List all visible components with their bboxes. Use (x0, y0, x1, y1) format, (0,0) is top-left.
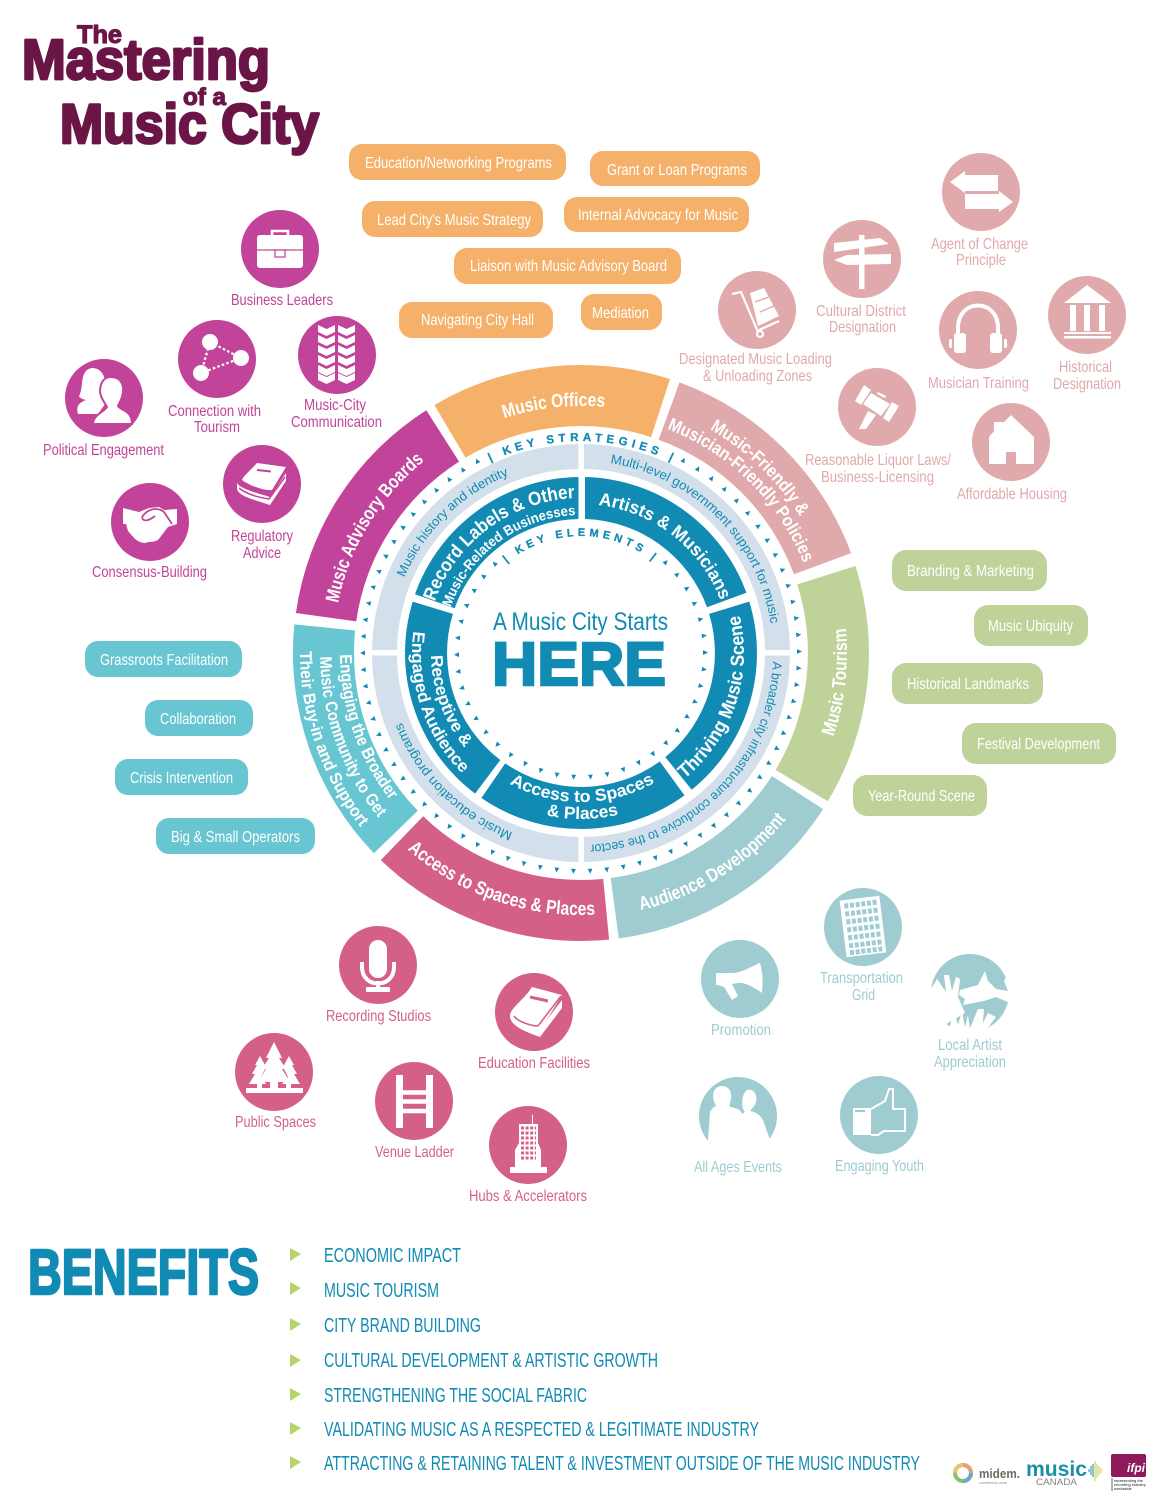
icon: Local Artist Appreciation (931, 954, 1010, 1033)
pill: Crisis Intervention (115, 759, 248, 795)
icon: Agent of Change Principle (942, 153, 1020, 231)
inner ring of arrowheads (437, 558, 717, 796)
label: Venue Ladder: Venue Ladder (375, 1144, 455, 1161)
pill: Liaison with Music Advisory Board: Liaison with Music Advisory Board (470, 258, 667, 275)
label: Access to Spaces: Access to Spaces (510, 775, 654, 803)
label: Transportation Grid (820, 970, 903, 1004)
segment: Access to Spaces & Places (381, 816, 609, 941)
icon: Musician Training (939, 291, 1017, 369)
outer ring labels (240, 370, 891, 978)
outer ring of arrowheads (323, 438, 835, 909)
pill: Liaison with Music Advisory Board (454, 248, 681, 284)
icon: Designated Music Loading & Unloading Zones (718, 271, 796, 349)
quadrant: multi-level government support (584, 444, 790, 650)
label: Public Spaces: Public Spaces (235, 1114, 316, 1131)
label: Affordable Housing: Affordable Housing (957, 486, 1067, 503)
segment: Receptive & Engaged Audience (405, 602, 500, 794)
key elements heading: | KEY ELEMENTS | (502, 528, 657, 564)
middle ring labels (396, 454, 782, 852)
label: Recording Studios: Recording Studios (326, 1008, 431, 1025)
icon: Reasonable Liquor Laws (838, 368, 916, 446)
pill: Year-Round Scene: Year-Round Scene (868, 788, 975, 805)
logo: ifpi: recording industry (1114, 1482, 1146, 1487)
label: Music Advisory Boards: Music Advisory Boards (326, 454, 423, 602)
pill: Branding & Marketing (892, 550, 1047, 591)
centre heading: HERE (492, 630, 666, 698)
quadrant: broader city infrastructure (584, 656, 790, 862)
bullet: Economic Impact: ECONOMIC IMPACT (324, 1245, 461, 1267)
label: Local Artist Appreciation: Appreciation (934, 1054, 1006, 1071)
label: Music education programs: Music education programs (396, 723, 512, 840)
pill: Mediation (581, 294, 662, 330)
pill: Internal Advocacy for Music: Internal Advocacy for Music (578, 207, 738, 224)
label: Thriving Music Scene: Thriving Music Scene (676, 616, 744, 776)
icon: Business Leaders (241, 210, 319, 288)
pill: Grant or Loan Programs: Grant or Loan Programs (607, 162, 747, 179)
teal community pills (85, 641, 315, 854)
logo: midem (955, 1465, 1020, 1485)
label: Musician-Friendly Policies: Musician-Friendly Policies (668, 418, 812, 562)
pill: Mediation: Mediation (592, 305, 649, 322)
label: Agent of Change Principle (931, 236, 1028, 269)
quadrant: music education programs (372, 656, 578, 862)
label: Designated Music Loading & Unloading Zones (679, 351, 832, 385)
label: Political Engagement: Political Engagement (43, 442, 164, 459)
pill: Festival Development: Festival Development (977, 736, 1101, 753)
icon: Political Engagement (65, 359, 143, 437)
label: Multi-level government support for music: Multi-level government support for music (611, 454, 779, 624)
title (22, 21, 319, 155)
segment: Artists & Musicians (585, 477, 746, 607)
label: Designated Music Loading & Unloading Zones: & Unloading Zones (703, 368, 812, 385)
segment: Music-Friendly & Musician-Friendly Policies (659, 382, 851, 574)
label: Connection with Tourism: Connection with (168, 403, 261, 420)
label: Reasonable Liquor Laws / Business-Licensing: Reasonable Liquor Laws/ (805, 452, 951, 469)
pill: Music Ubiquity (974, 605, 1088, 646)
label: Engaging Youth: Engaging Youth (835, 1158, 924, 1175)
bullet: Validating Music: VALIDATING MUSIC AS A RESPECTED & LEGITIMATE INDUSTRY (324, 1419, 759, 1441)
label: Music-Related Businesses: Music-Related Businesses (442, 508, 575, 607)
title: of a (183, 84, 227, 111)
pill: Music Ubiquity: Music Ubiquity (988, 618, 1073, 635)
pill: Branding & Marketing: Branding & Marketing (907, 563, 1034, 580)
group: pink venue icons (235, 926, 590, 1205)
bullet: City Brand Building: CITY BRAND BUILDING (324, 1315, 481, 1337)
bullet: Economic Impact (290, 1245, 461, 1267)
icon: Hubs & Accelerators (489, 1106, 567, 1184)
label: Music-City Communication: Communication (291, 414, 382, 431)
label: A broader city infrastructure conducive to the sector: A broader city infrastructure conducive to the sector (590, 661, 782, 852)
icon: Transportation Grid (824, 888, 902, 966)
label: Artists & Musicians: Artists & Musicians (598, 493, 728, 599)
pill: Grant or Loan Programs (590, 151, 760, 186)
label: Consensus-Building: Consensus-Building (92, 564, 207, 581)
bullet: Validating Music (290, 1419, 759, 1441)
label: Musician Training: Musician Training (928, 375, 1029, 392)
key strategies heading: | KEY STRATEGIES | (487, 432, 674, 464)
icon: Regulatory Advice (223, 445, 301, 523)
label: Reasonable Liquor Laws / Business-Licensing: Business-Licensing (821, 469, 934, 486)
segment: Music Offices (434, 365, 670, 458)
inner ring labels (408, 487, 744, 820)
pill: Festival Development (962, 723, 1116, 764)
label: Receptive &: Receptive & (430, 656, 471, 748)
segment: Thriving Music Scene (665, 602, 757, 790)
logo: midem: connected by music (979, 1480, 1007, 1485)
icon: Affordable Housing (972, 403, 1050, 481)
centre heading: A Music City Starts (493, 608, 668, 636)
group: rose policy icons (679, 153, 1126, 503)
segment: Record Labels & Other Music-Related Businesses (415, 477, 578, 608)
pill: Collaboration: Collaboration (160, 711, 236, 728)
label: Promotion: Promotion (711, 1022, 771, 1039)
icon: All Ages Events (699, 1077, 777, 1156)
label: Agent of Change Principle: Agent of Change (931, 236, 1028, 253)
label: Cultural District Designation: Designation (829, 319, 896, 336)
icon: Promotion (701, 940, 779, 1018)
label: Local Artist Appreciation (934, 1037, 1006, 1071)
bullet: Music Tourism: MUSIC TOURISM (324, 1280, 439, 1302)
pill: Collaboration (145, 700, 253, 736)
segment: Access to Spaces & Places (481, 761, 684, 829)
icon: Music-City Communication (298, 316, 376, 394)
green tourism pills (853, 550, 1116, 816)
pill: Big & Small Operators: Big & Small Operators (171, 829, 300, 846)
icon: Public Spaces (235, 1033, 313, 1111)
label: Cultural District Designation (816, 303, 906, 336)
icon: Education Facilities (495, 973, 573, 1051)
label: Historical Designation: Designation (1053, 376, 1121, 393)
icon: Cultural District Designation (823, 220, 901, 298)
label: Music Offices: Music Offices (501, 392, 605, 418)
segment: Music Advisory Boards (296, 410, 459, 621)
label: Access to Spaces & Places: Access to Spaces & Places (408, 842, 594, 916)
logo: Music Canada (1026, 1458, 1101, 1487)
pill: Crisis Intervention: Crisis Intervention (130, 770, 233, 787)
icon: Venue Ladder (375, 1062, 453, 1140)
pill: Education/Networking Programs (349, 144, 566, 180)
quadrant: music history and identity (372, 444, 578, 650)
label: Music-City Communication: Music-City (304, 397, 366, 414)
pill: Lead City's Music Strategy (362, 201, 543, 237)
label: & Places: & Places (548, 804, 618, 820)
icon: Connection with Tourism (178, 320, 256, 398)
title: The (77, 21, 122, 49)
label: Music-City Communication (291, 397, 382, 431)
pill: Grassroots Facilitation: Grassroots Facilitation (100, 652, 228, 669)
label: Regulatory Advice: Advice (243, 545, 281, 562)
label: Engaging the Broader: Engaging the Broader (338, 655, 398, 798)
orange programme pills (349, 144, 760, 338)
segment: Audience Development (611, 776, 823, 938)
icon: Consensus-Building (111, 483, 189, 561)
logo: Music Canada: music (1026, 1458, 1087, 1481)
label: Record Labels & Other: Record Labels & Other (422, 487, 574, 601)
bullet: Music Tourism (290, 1280, 439, 1302)
pill: Grassroots Facilitation (85, 641, 242, 677)
bullet: Social Fabric: STRENGTHENING THE SOCIAL FABRIC (324, 1385, 587, 1407)
label: Connection with Tourism (168, 403, 261, 436)
label: Transportation Grid: Transportation (820, 970, 903, 987)
logo: ifpi: representing the (1114, 1478, 1144, 1483)
pill: Education/Networking Programs: Education/Networking Programs (365, 155, 552, 172)
title: Mastering (22, 28, 270, 92)
logo: ifpi: worldwide (1114, 1486, 1133, 1491)
title: Music City (60, 92, 319, 155)
label: Hubs & Accelerators: Hubs & Accelerators (469, 1188, 587, 1205)
segment: Engaging the Broader Music Community (293, 624, 418, 853)
label: Cultural District Designation: Cultural District (816, 303, 906, 320)
outer ring: key strategies (293, 365, 869, 941)
label: Connection with Tourism: Tourism (194, 419, 240, 436)
label: Audience Development: Audience Development (640, 812, 786, 910)
pill: Historical Landmarks: Historical Landmarks (907, 676, 1029, 693)
label: Engaged Audience: Engaged Audience (408, 632, 467, 772)
logo: ifpi (1111, 1454, 1146, 1491)
bullet: Cultural Development: CULTURAL DEVELOPMENT & ARTISTIC GROWTH (324, 1350, 658, 1372)
bullet: Attracting Talent (290, 1453, 920, 1475)
icon: Historical Designation (1048, 276, 1126, 354)
pill: Big & Small Operators (156, 818, 315, 854)
bullet: Attracting Talent: ATTRACTING & RETAINING TALENT & INVESTMENT OUTSIDE OF THE MUSIC INDUSTRY (324, 1453, 920, 1475)
label: Transportation Grid: Grid (852, 987, 875, 1004)
inner ring: key elements (405, 477, 757, 829)
label: Their Buy-in and Support: Their Buy-in and Support (300, 651, 368, 828)
logo: Music Canada: CANADA (1036, 1477, 1077, 1487)
label: Designated Music Loading & Unloading Zones: Designated Music Loading (679, 351, 832, 368)
segment: Music Tourism (776, 566, 869, 801)
pill: Lead City's Music Strategy: Lead City's Music Strategy (377, 212, 531, 229)
label: Music Tourism: Music Tourism (821, 629, 848, 736)
label: Regulatory Advice: Regulatory (231, 528, 293, 545)
logo: ifpi: ifpi (1127, 1461, 1146, 1475)
pill: Navigating City Hall: Navigating City Hall (421, 312, 534, 329)
benefits list (290, 1245, 920, 1475)
middle ring: city conditions (372, 444, 790, 862)
pill: Historical Landmarks (892, 663, 1043, 704)
group: purple stakeholder icons (43, 210, 382, 581)
bullet: Cultural Development (290, 1350, 658, 1372)
group: mint audience icons (694, 888, 1010, 1176)
icon: Recording Studios (339, 926, 417, 1004)
bullet: Social Fabric (290, 1385, 587, 1407)
pill: Year-Round Scene (853, 775, 987, 816)
label: Music Community to Get: Music Community to Get (320, 657, 386, 818)
pill: Internal Advocacy for Music (564, 197, 749, 232)
label: Regulatory Advice (231, 528, 293, 562)
label: Education Facilities: Education Facilities (478, 1055, 590, 1072)
label: Music-Friendly &: Music-Friendly & (710, 419, 808, 516)
icon: Engaging Youth (840, 1076, 918, 1154)
bullet: City Brand Building (290, 1315, 481, 1337)
label: Local Artist Appreciation: Local Artist (938, 1037, 1002, 1054)
label: Business Leaders: Business Leaders (231, 292, 333, 309)
label: Historical Designation (1053, 359, 1121, 393)
label: All Ages Events: All Ages Events (694, 1159, 782, 1176)
label: Agent of Change Principle: Principle (956, 252, 1006, 269)
label: Historical Designation: Historical (1059, 359, 1112, 376)
logo: midem: midem. (979, 1467, 1020, 1481)
label: Music history and identity: Music history and identity (396, 468, 506, 577)
benefits heading: BENEFITS (28, 1236, 259, 1308)
label: Reasonable Liquor Laws / Business-Licensing (805, 452, 951, 486)
pill: Navigating City Hall (399, 302, 553, 338)
